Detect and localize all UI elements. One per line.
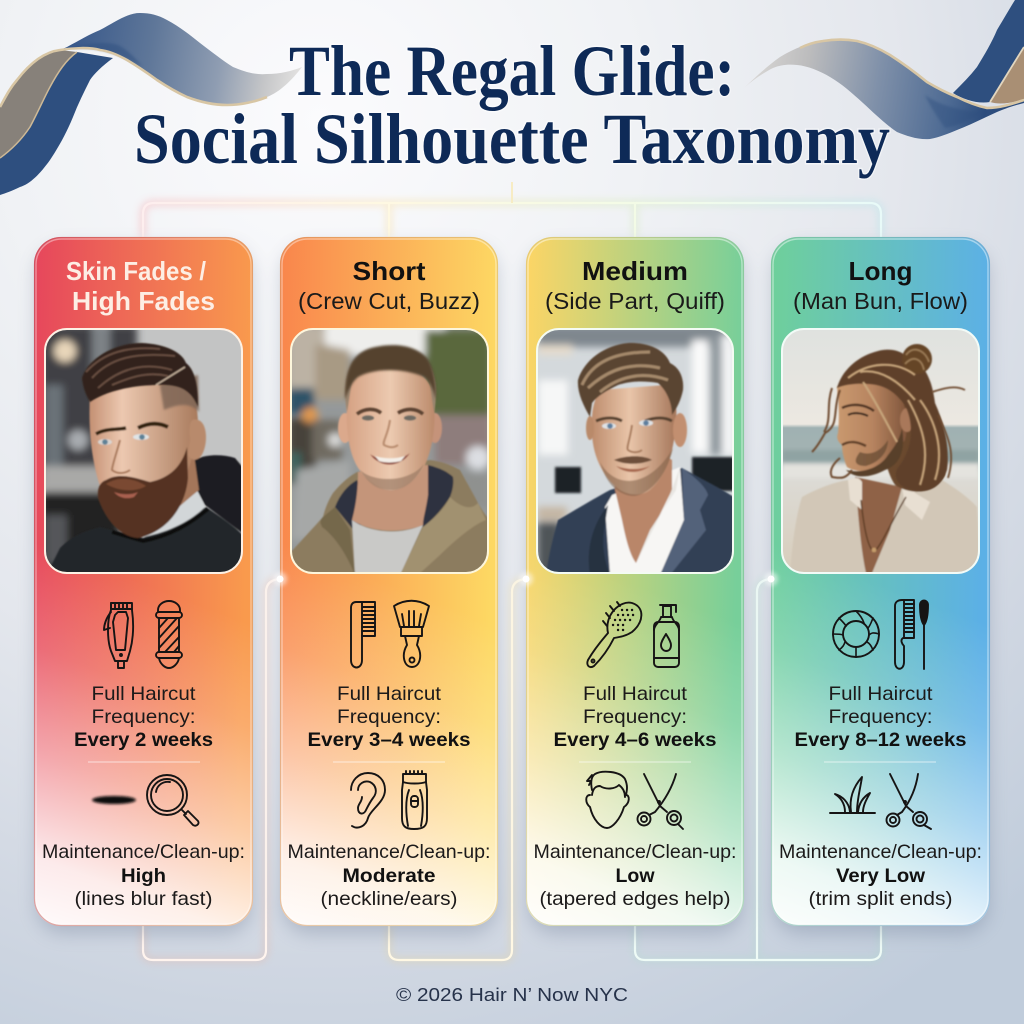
label: full haircut frequency: Every 4–6 weeks xyxy=(554,729,717,751)
label: maintenance high xyxy=(42,841,245,910)
label: full haircut frequency: Every 2 weeks xyxy=(74,729,213,751)
photo: medium side part xyxy=(537,325,737,577)
label: full haircut frequency: Frequency: xyxy=(583,706,687,728)
title: Social Silhouette Taxonomy xyxy=(134,99,890,179)
panel: skin fades / high fades xyxy=(34,237,253,926)
card shadows xyxy=(36,246,989,934)
heading xyxy=(793,256,968,314)
label: maintenance moderate: Maintenance/Clean-up: xyxy=(288,841,490,863)
label: full haircut frequency: Full Haircut xyxy=(828,683,933,705)
ribbon: top right decorative wave xyxy=(745,0,1024,139)
heading xyxy=(545,256,725,314)
icon: tapered head xyxy=(586,772,629,828)
label: full haircut frequency: Full Haircut xyxy=(337,683,442,705)
photo: short crew cut xyxy=(288,322,491,575)
label: maintenance high: (lines blur fast) xyxy=(74,888,212,910)
label: maintenance high: Maintenance/Clean-up: xyxy=(42,841,245,863)
icon: trimmer xyxy=(402,771,427,829)
label: full haircut frequency: Full Haircut xyxy=(92,683,196,705)
label: full haircut frequency xyxy=(308,683,471,751)
heading: Short xyxy=(352,256,426,286)
label: full haircut frequency: Every 3–4 weeks xyxy=(308,729,471,751)
heading: Long xyxy=(848,256,912,286)
icon: grass split ends xyxy=(830,777,875,813)
icon: pump bottle xyxy=(654,605,679,667)
connector: top tree xyxy=(143,182,881,237)
icon: scissors xyxy=(638,774,683,829)
label: maintenance moderate: Moderate xyxy=(342,865,436,887)
label: maintenance very low xyxy=(779,841,982,910)
heading xyxy=(66,256,215,316)
icon: neck brush xyxy=(394,601,429,667)
label: full haircut frequency: Frequency: xyxy=(828,706,932,728)
connector: bottom links xyxy=(143,579,881,960)
heading: (Crew Cut, Buzz) xyxy=(298,288,480,314)
heading xyxy=(298,256,480,314)
label: maintenance very low: Maintenance/Clean-up: xyxy=(779,841,982,863)
heading: (Man Bun, Flow) xyxy=(793,288,968,314)
photo: skin fade xyxy=(40,325,245,582)
icon: comb xyxy=(351,602,375,668)
icon: magnifying glass xyxy=(147,775,199,826)
label: full haircut frequency: Every 8–12 weeks xyxy=(794,729,967,751)
label: maintenance moderate xyxy=(288,841,490,910)
icon: barber pole xyxy=(156,601,182,668)
label: full haircut frequency xyxy=(74,683,213,751)
title xyxy=(134,31,890,179)
icon: ear xyxy=(351,773,385,828)
heading: Medium xyxy=(582,256,688,286)
label: maintenance low: (tapered edges help) xyxy=(540,888,730,910)
photo: long man bun xyxy=(782,329,980,575)
icon: hair clipper xyxy=(104,603,133,668)
icon: hair tie ring xyxy=(833,611,879,657)
label: maintenance high: High xyxy=(121,865,166,887)
ribbon: top left decorative wave xyxy=(0,13,302,195)
title: The Regal Glide: xyxy=(289,31,735,111)
label: maintenance moderate: (neckline/ears) xyxy=(320,888,458,910)
label: maintenance very low: (trim split ends) xyxy=(808,888,952,910)
heading: Skin Fades / xyxy=(66,256,206,286)
label: full haircut frequency: Frequency: xyxy=(337,706,441,728)
icon: tail comb and pick xyxy=(895,600,928,669)
footer copyright: © 2026 Hair N’ Now NYC xyxy=(396,984,628,1005)
label: maintenance low: Maintenance/Clean-up: xyxy=(534,841,736,863)
label: full haircut frequency: Full Haircut xyxy=(583,683,688,705)
panel: medium xyxy=(526,237,744,926)
heading: (Side Part, Quiff) xyxy=(545,288,725,314)
panel: short xyxy=(280,237,498,926)
label: maintenance low xyxy=(534,841,736,910)
icon: paddle hair brush xyxy=(587,602,641,667)
label: maintenance low: Low xyxy=(616,865,655,887)
heading: High Fades xyxy=(72,286,215,316)
icon: scissors xyxy=(886,774,931,829)
label: maintenance very low: Very Low xyxy=(836,865,926,887)
connector dots xyxy=(273,572,778,586)
label: full haircut frequency xyxy=(794,683,967,751)
icon: blurred line xyxy=(92,796,136,804)
panel: long xyxy=(771,237,990,926)
label: full haircut frequency xyxy=(554,683,717,751)
label: full haircut frequency: Frequency: xyxy=(92,706,196,728)
